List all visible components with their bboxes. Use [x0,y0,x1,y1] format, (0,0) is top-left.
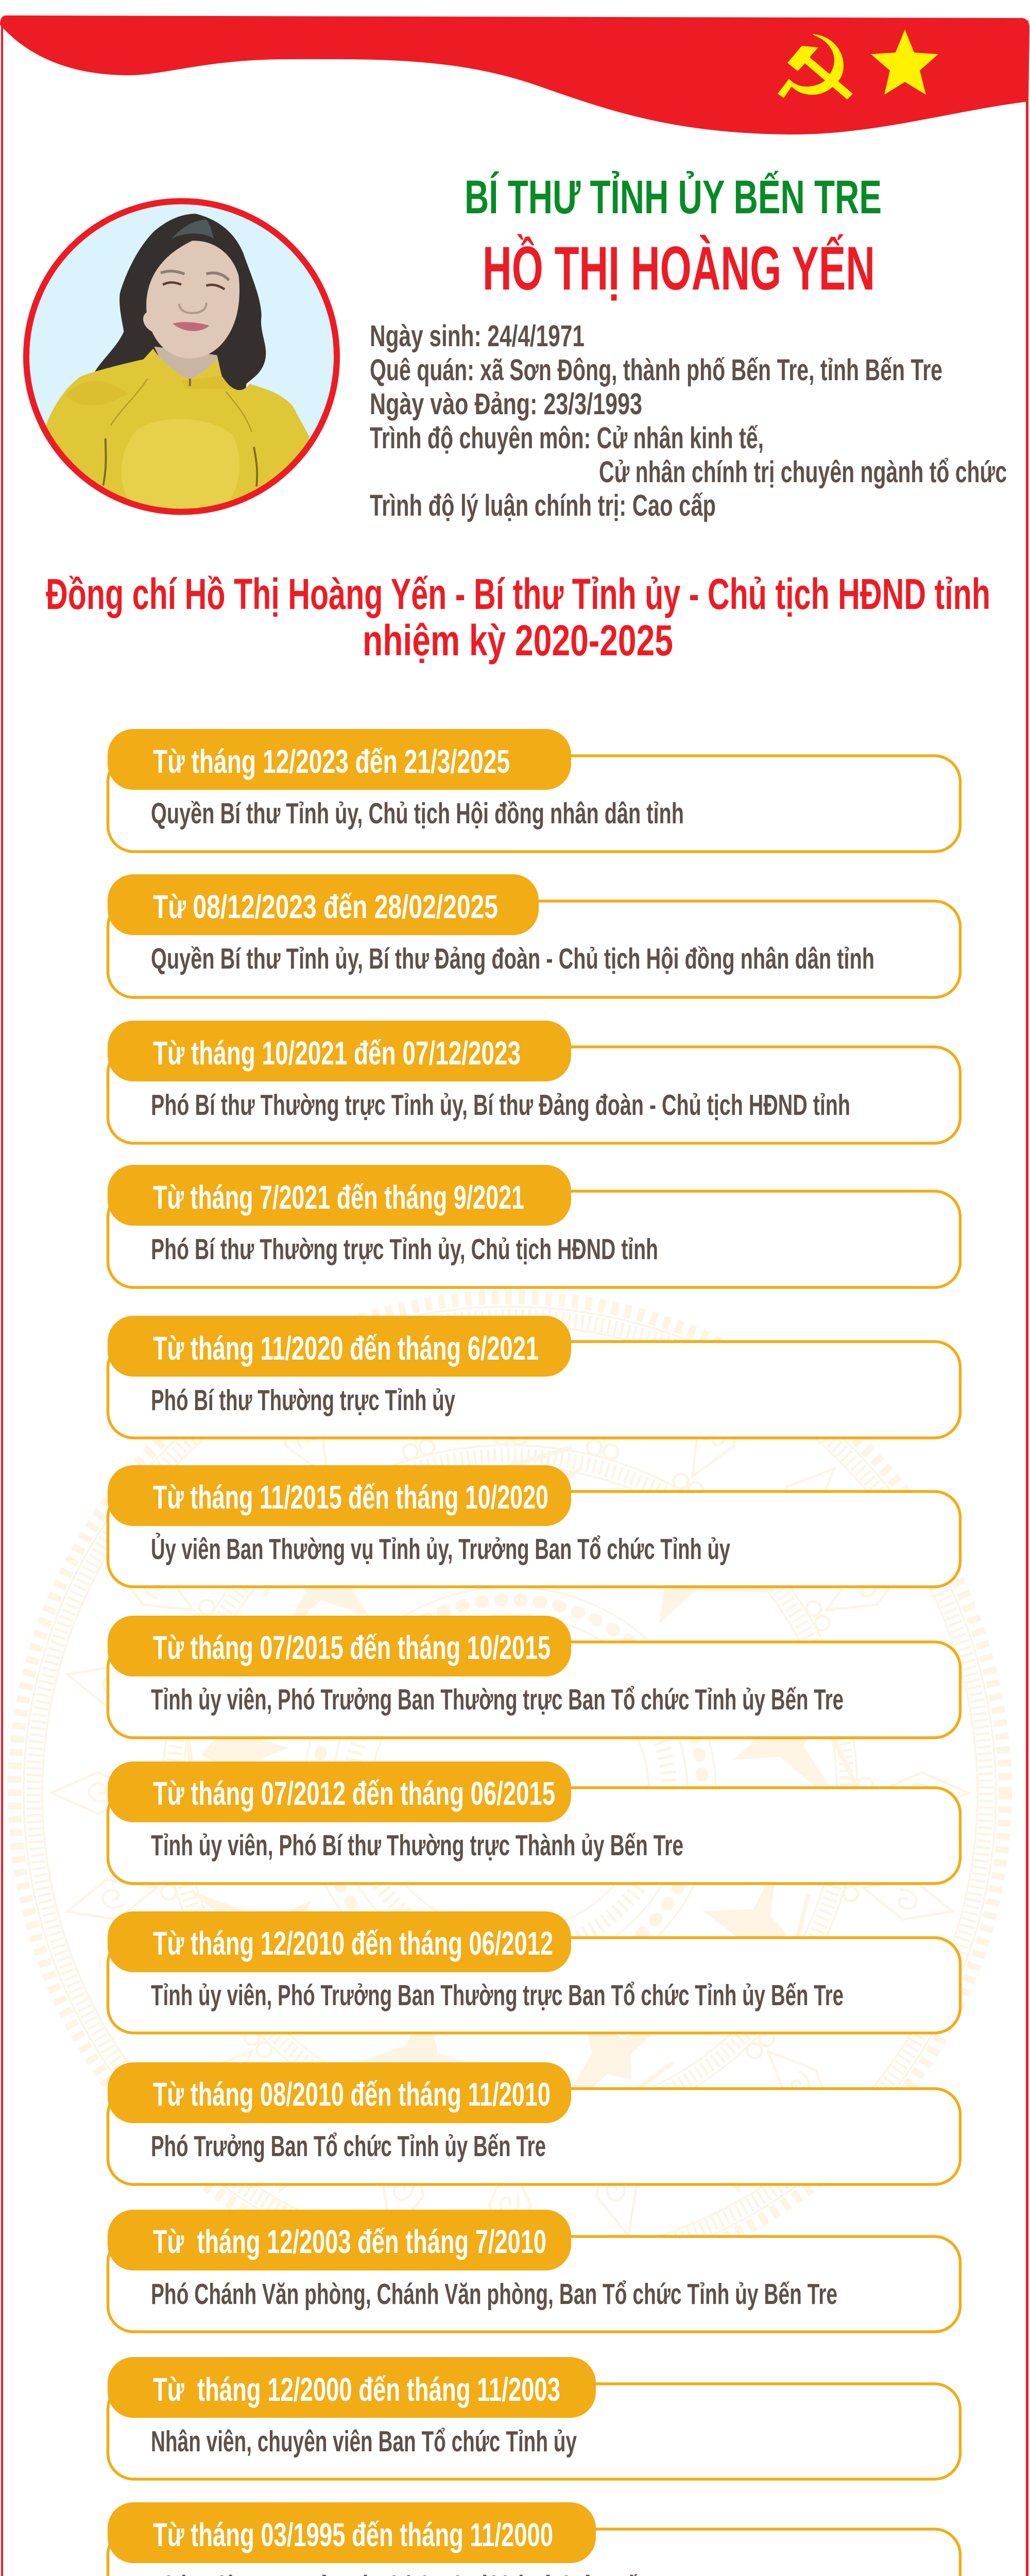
date pill 13: Từ tháng 03/1995 đến tháng 11/2000 [153,2516,553,2553]
date pill 13 [108,2502,596,2563]
biography details [370,319,1007,522]
icon: hammer and sickle [778,34,853,99]
role 10: Phó Trưởng Ban Tổ chức Tỉnh ủy Bến Tre [151,2130,546,2163]
timeline card 4 [108,1165,960,1287]
role 6: Ủy viên Ban Thường vụ Tỉnh ủy, Trưởng Ban Tổ chức Tỉnh ủy [151,1532,730,1566]
icon: yellow star [871,29,938,95]
date pill 12 [108,2357,596,2418]
timeline card 7 [108,1616,960,1738]
timeline card 3 [108,1021,960,1143]
date pill 12: Từ tháng 12/2000 đến tháng 11/2003 [153,2371,560,2408]
timeline card 2 [108,874,960,997]
biography details: Trình độ chuyên môn: Cử nhân kinh tế, [370,421,764,455]
role 1: Quyền Bí thư Tỉnh ủy, Chủ tịch Hội đồng nhân dân tỉnh [151,797,684,830]
date pill 8 [108,1761,571,1822]
date pill 8: Từ tháng 07/2012 đến tháng 06/2015 [153,1775,555,1812]
timeline card 5 [108,1316,960,1438]
date pill 6 [108,1465,571,1526]
biography details: Trình độ lý luận chính trị: Cao cấp [370,489,716,522]
date pill 7: Từ tháng 07/2015 đến tháng 10/2015 [153,1629,551,1666]
main title: nhiệm kỳ 2020-2025 [363,616,673,665]
date pill 3 [108,1021,571,1081]
timeline card 11 [108,2210,960,2332]
date pill 6: Từ tháng 11/2015 đến tháng 10/2020 [153,1479,548,1516]
header red wave banner [0,15,1029,134]
date pill 1: Từ tháng 12/2023 đến 21/3/2025 [153,743,510,780]
timeline card 10 [108,2062,960,2184]
date pill 7 [108,1616,571,1676]
role 8: Tỉnh ủy viên, Phó Bí thư Thường trực Thành ủy Bến Tre [151,1829,683,1862]
date pill 9 [108,1911,571,1972]
background emblem watermark [14,1297,1005,2289]
date pill 3: Từ tháng 10/2021 đến 07/12/2023 [153,1035,521,1072]
role 4: Phó Bí thư Thường trực Tỉnh ủy, Chủ tịch HĐND tỉnh [151,1233,658,1266]
date pill 11: Từ tháng 12/2003 đến tháng 7/2010 [153,2223,546,2260]
date pill 5: Từ tháng 11/2020 đến tháng 6/2021 [153,1330,539,1367]
date pill 5 [108,1316,571,1377]
date pill 10: Từ tháng 08/2010 đến tháng 11/2010 [153,2076,551,2113]
timeline card 9 [108,1911,960,2033]
timeline card 8 [108,1761,960,1884]
portrait photo in red circle [21,196,345,532]
timeline card 13 [108,2502,960,2576]
biography details: Ngày vào Đảng: 23/3/1993 [370,387,642,421]
timeline card 6 [108,1465,960,1587]
date pill 4 [108,1165,571,1226]
date pill 10 [108,2062,571,2123]
role 5: Phó Bí thư Thường trực Tỉnh ủy [151,1384,455,1417]
date pill 11 [108,2210,571,2270]
timeline card 1 [108,729,960,852]
role 12: Nhân viên, chuyên viên Ban Tổ chức Tỉnh ủy [151,2425,577,2458]
biography details: Ngày sinh: 24/4/1971 [370,319,585,353]
date pill 4: Từ tháng 7/2021 đến tháng 9/2021 [153,1179,524,1216]
date pill 2: Từ 08/12/2023 đến 28/02/2025 [153,888,498,925]
date pill 9: Từ tháng 12/2010 đến tháng 06/2012 [153,1925,553,1962]
date pill 2 [108,874,539,935]
timeline card 12 [108,2357,960,2479]
date pill 1 [108,729,571,790]
main title [46,570,990,665]
